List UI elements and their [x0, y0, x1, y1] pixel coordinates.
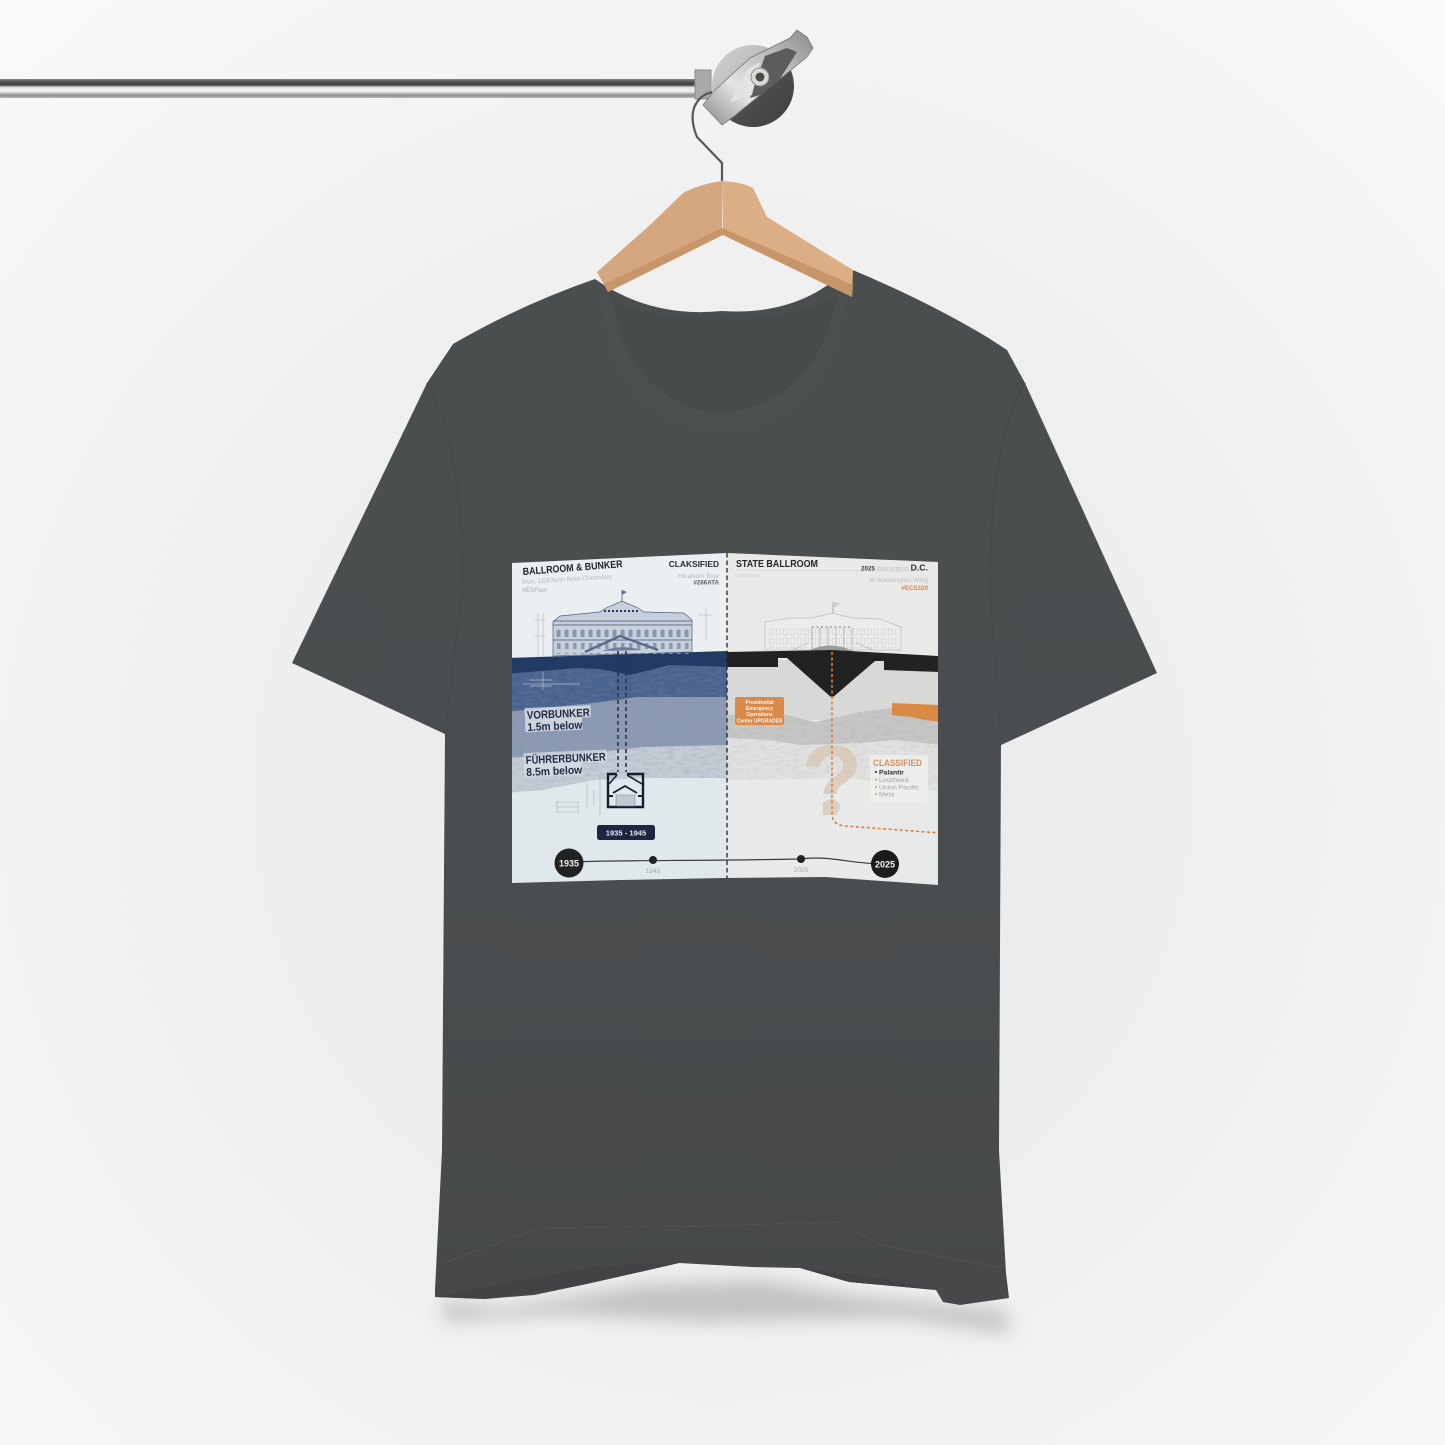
- label: vorbunker: [524, 705, 592, 734]
- header left: CLAKSIFIED: [669, 559, 719, 569]
- label: fuhrerbunker: 8.5m below: [526, 765, 583, 779]
- collar ring: [600, 285, 848, 432]
- classified box: Meta: [879, 792, 894, 798]
- orange callout: Emergency: [746, 706, 773, 712]
- orange callout: [735, 697, 784, 725]
- paper right: [727, 553, 938, 722]
- shirt shadow: [442, 1280, 1010, 1334]
- date badge: [597, 825, 655, 840]
- label: vorbunker: 1.5m below: [527, 720, 583, 734]
- orange block: [892, 703, 940, 722]
- orange dashed path: [832, 652, 940, 833]
- left strata: [505, 651, 727, 890]
- timeline: 2025: [794, 867, 809, 874]
- classified box: Lockheed: [879, 777, 909, 784]
- classified box: Union Pacific: [879, 784, 919, 792]
- header left: Hicalsom Blue: [678, 573, 719, 580]
- center divider: [726, 553, 728, 880]
- old ballroom elevation: [535, 590, 712, 657]
- label: fuhrerbunker: [523, 749, 607, 779]
- shirt inner back neck: [612, 296, 838, 413]
- orange callout: Operations: [746, 712, 773, 718]
- timeline: [554, 848, 899, 878]
- date badge: 1935 - 1945: [606, 828, 647, 838]
- orange callout: Center UPGRADES: [737, 718, 783, 724]
- label: fuhrerbunker: FÜHRERBUNKER: [525, 751, 606, 767]
- header right: #EC5320: [901, 585, 928, 592]
- pulley bracket: [695, 30, 813, 127]
- right strata: [727, 660, 938, 791]
- hanging rail: [0, 79, 696, 98]
- question mark: [806, 744, 857, 815]
- timeline: 1945: [646, 868, 661, 875]
- header left: Anon, 1338 Benin Relah Chantrabley: [522, 573, 613, 586]
- t-shirt: [292, 268, 1157, 1305]
- header right: 2025 Washington D.C.: [861, 562, 928, 572]
- wooden hanger: [597, 181, 853, 297]
- header left: [522, 559, 720, 594]
- annotations in blue layer: [523, 672, 580, 690]
- hem stitching: [445, 1222, 1003, 1268]
- printed graphic: [505, 548, 942, 890]
- hanger hook wire: [693, 92, 722, 181]
- state ballroom elevation: [765, 602, 901, 651]
- classified box: [870, 755, 928, 796]
- timeline: 1935: [559, 858, 579, 868]
- header right: [735, 559, 928, 592]
- header left: #266ATA: [693, 580, 720, 586]
- header right: STATE BALLROOM: [736, 559, 818, 570]
- orange callout: Presidential: [745, 700, 774, 706]
- paper left: [512, 553, 727, 658]
- old bunker dashed shafts: [618, 651, 626, 772]
- classified box: Palantir: [879, 770, 904, 776]
- header left: #ESFIon: [522, 587, 547, 594]
- question mark: ?: [801, 725, 863, 837]
- label: vorbunker: VORBUNKER: [527, 707, 590, 722]
- header left: BALLROOM & BUNKER: [522, 559, 623, 578]
- timeline: 2025: [875, 860, 895, 870]
- header right: W.Washington Wing: [869, 577, 928, 584]
- classified box: CLASSIFIED: [873, 757, 922, 768]
- black ballroom foundation: [727, 650, 940, 698]
- header right: Unknown: [735, 573, 759, 579]
- bunker floor plan: [557, 773, 643, 815]
